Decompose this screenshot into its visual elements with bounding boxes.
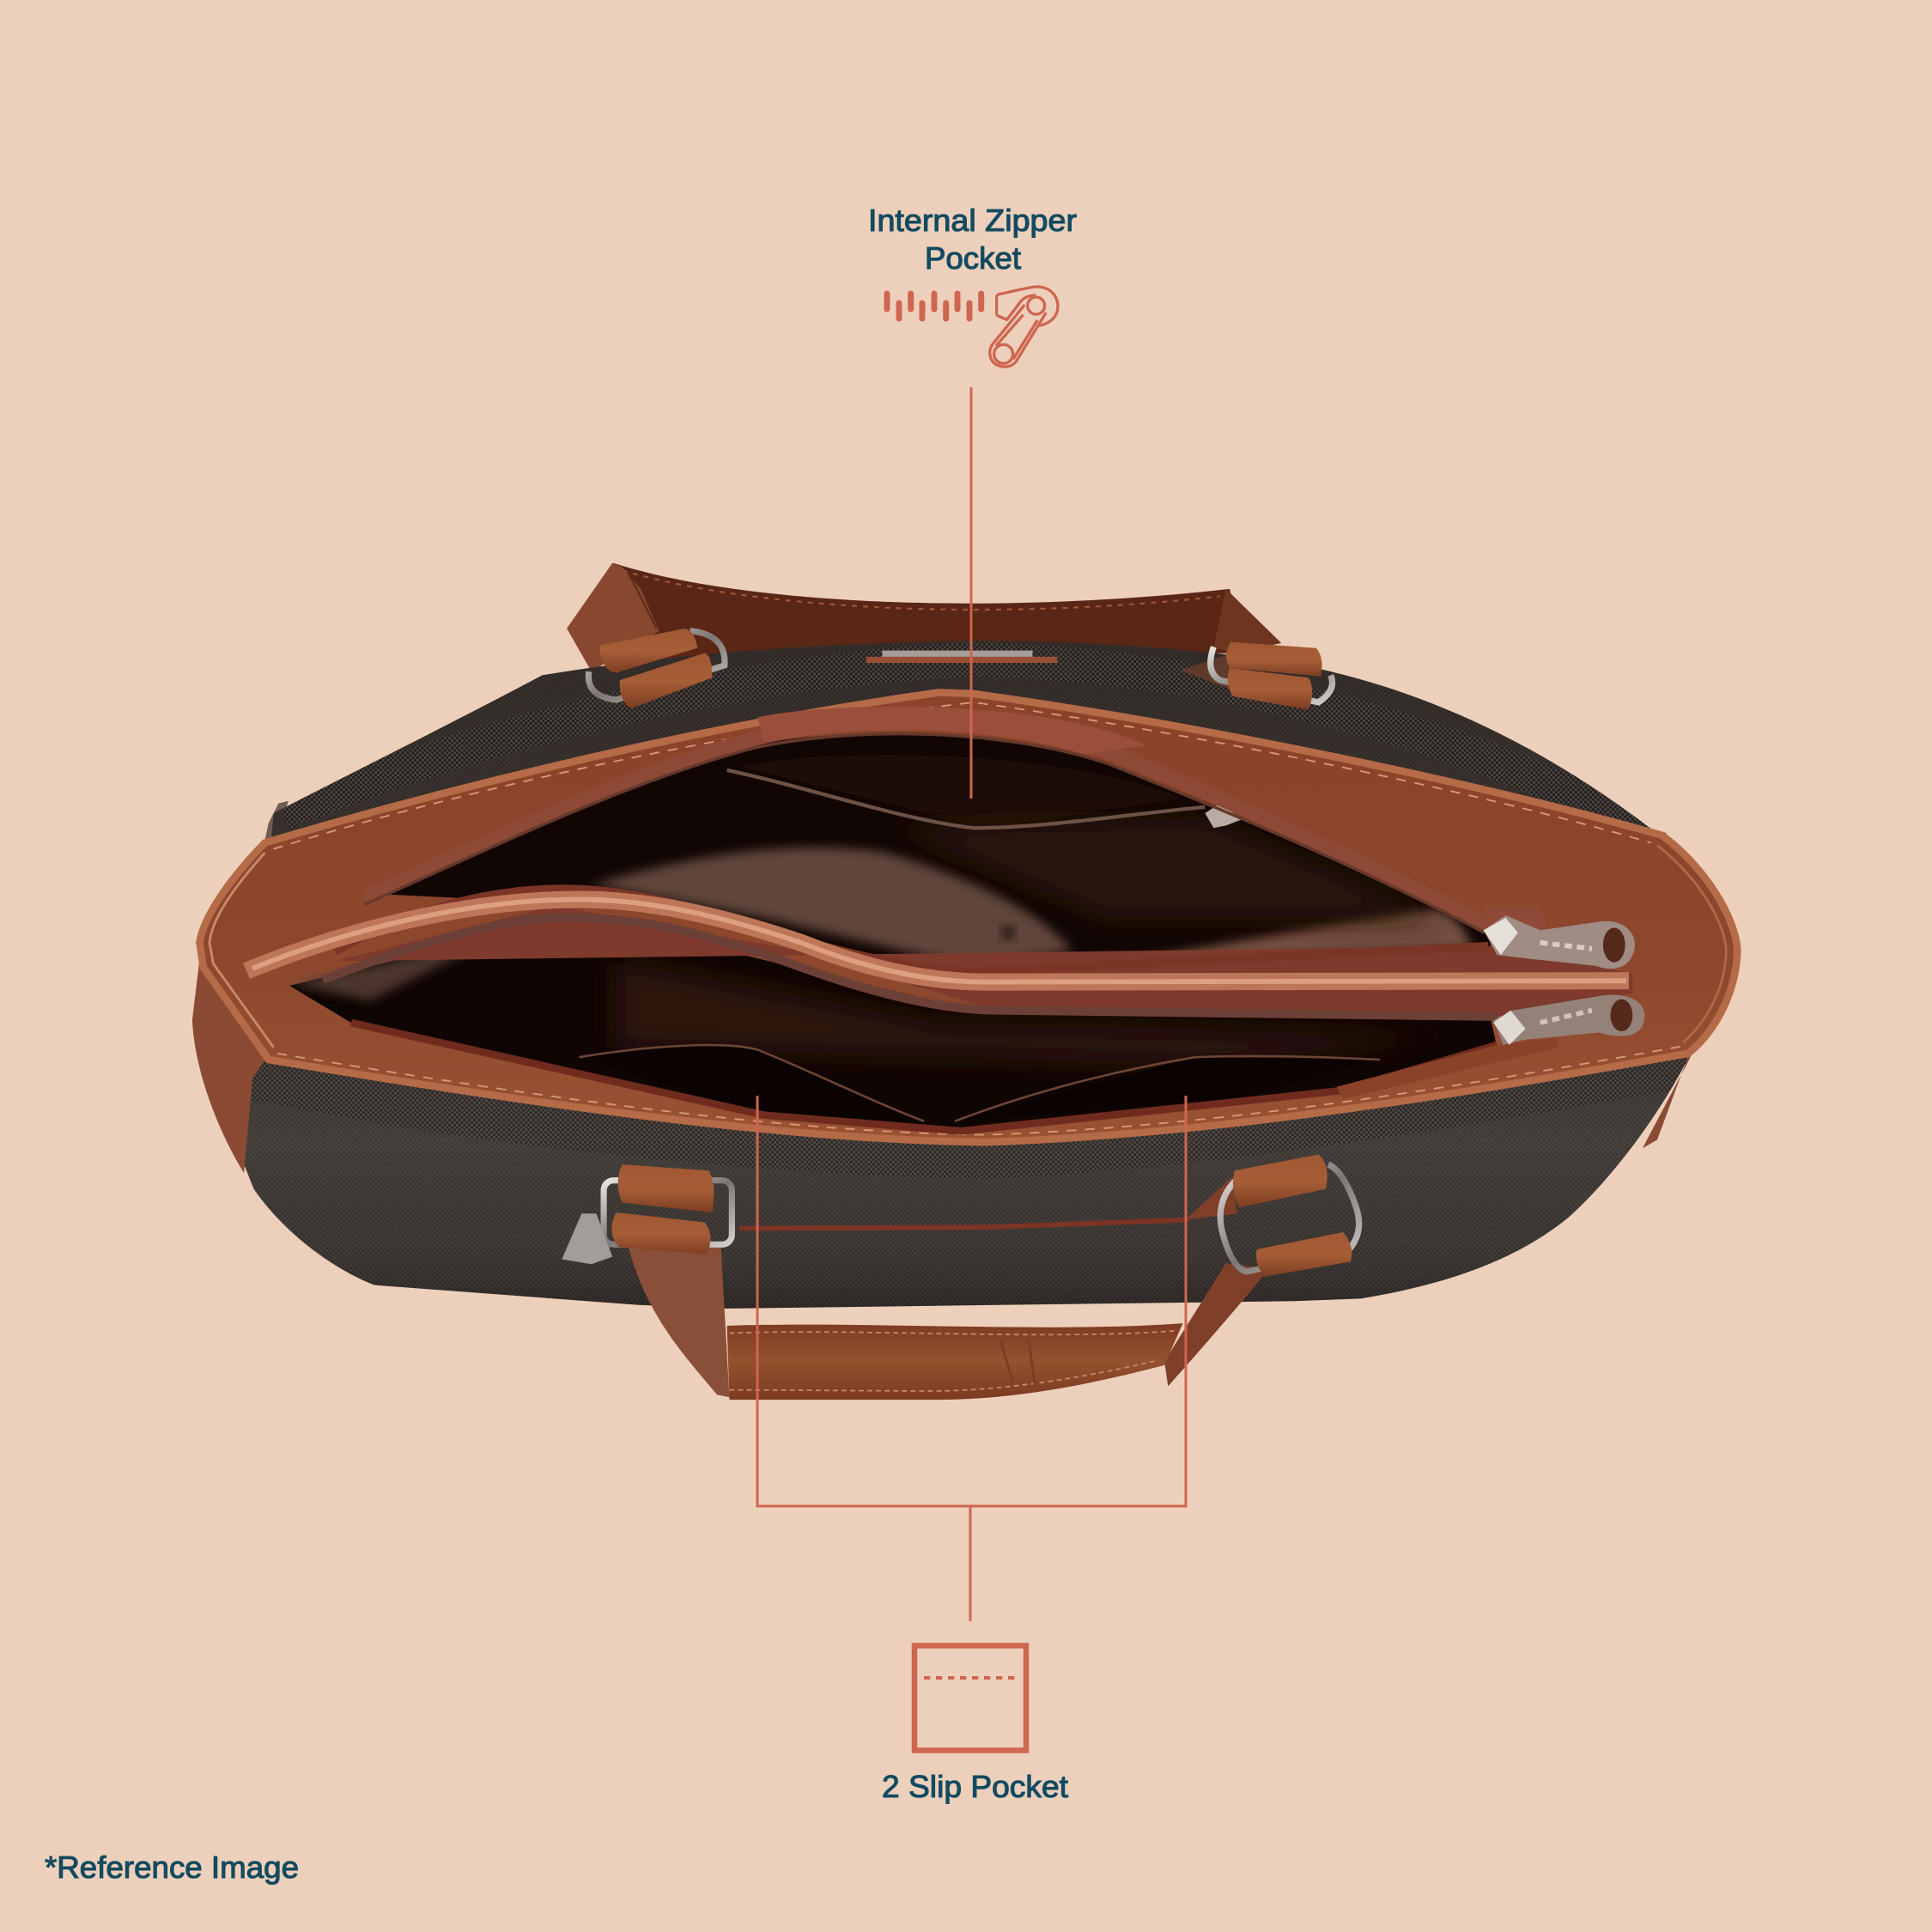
back handle inner band xyxy=(567,563,1281,671)
heading: Internal Zipper Pocket: Internal Zipper xyxy=(868,203,1077,238)
photo: handbag seen from above xyxy=(192,563,1737,1400)
central divider zippers and piping xyxy=(246,889,1632,1017)
icon: slip pocket xyxy=(914,1645,1026,1750)
rim ridge lines xyxy=(210,702,1726,1135)
leather interior rim xyxy=(199,692,1737,1142)
front left strap loops and ring xyxy=(604,1164,732,1255)
front handle strap xyxy=(629,1244,1269,1400)
footnote: *Reference Image xyxy=(45,1850,299,1885)
back right strap loops and ring xyxy=(1181,642,1333,710)
heading: Internal Zipper Pocket xyxy=(868,203,1077,276)
callout line: internal zipper pocket xyxy=(970,387,972,799)
internal zipper slider xyxy=(1205,804,1242,828)
zipper teeth xyxy=(887,294,981,319)
front right strap anchor xyxy=(1185,1176,1237,1220)
bag body: dark woven fabric xyxy=(234,641,1713,1309)
front pocket opening xyxy=(289,930,1497,1127)
back pocket opening xyxy=(363,734,1491,980)
back logo plate xyxy=(866,651,1057,663)
left leather end panel xyxy=(192,949,274,1173)
zipper pull bottom xyxy=(1493,995,1644,1045)
back zipper tape xyxy=(365,707,1552,955)
zipper slider xyxy=(990,287,1058,367)
back left strap loops and ring xyxy=(588,629,725,708)
left body corner xyxy=(264,801,289,845)
zipper charm xyxy=(562,1213,612,1264)
heading: Internal Zipper Pocket: Pocket xyxy=(925,240,1021,276)
front right strap loops and ring xyxy=(1220,1155,1359,1277)
label: 2 Slip Pocket: 2 Slip Pocket xyxy=(882,1769,1068,1804)
slip pocket edges xyxy=(579,1045,1380,1121)
front zipper on bag xyxy=(739,1220,1189,1229)
front zipper tape xyxy=(351,1023,1558,1131)
right body corner tip xyxy=(1649,828,1671,845)
right leather end panel xyxy=(1643,1050,1691,1148)
zipper pull top xyxy=(1484,915,1635,969)
internal zipper pocket edge xyxy=(727,770,1205,828)
bracket: slip pockets xyxy=(757,1096,1186,1621)
icon: zipper pull xyxy=(887,287,1058,367)
